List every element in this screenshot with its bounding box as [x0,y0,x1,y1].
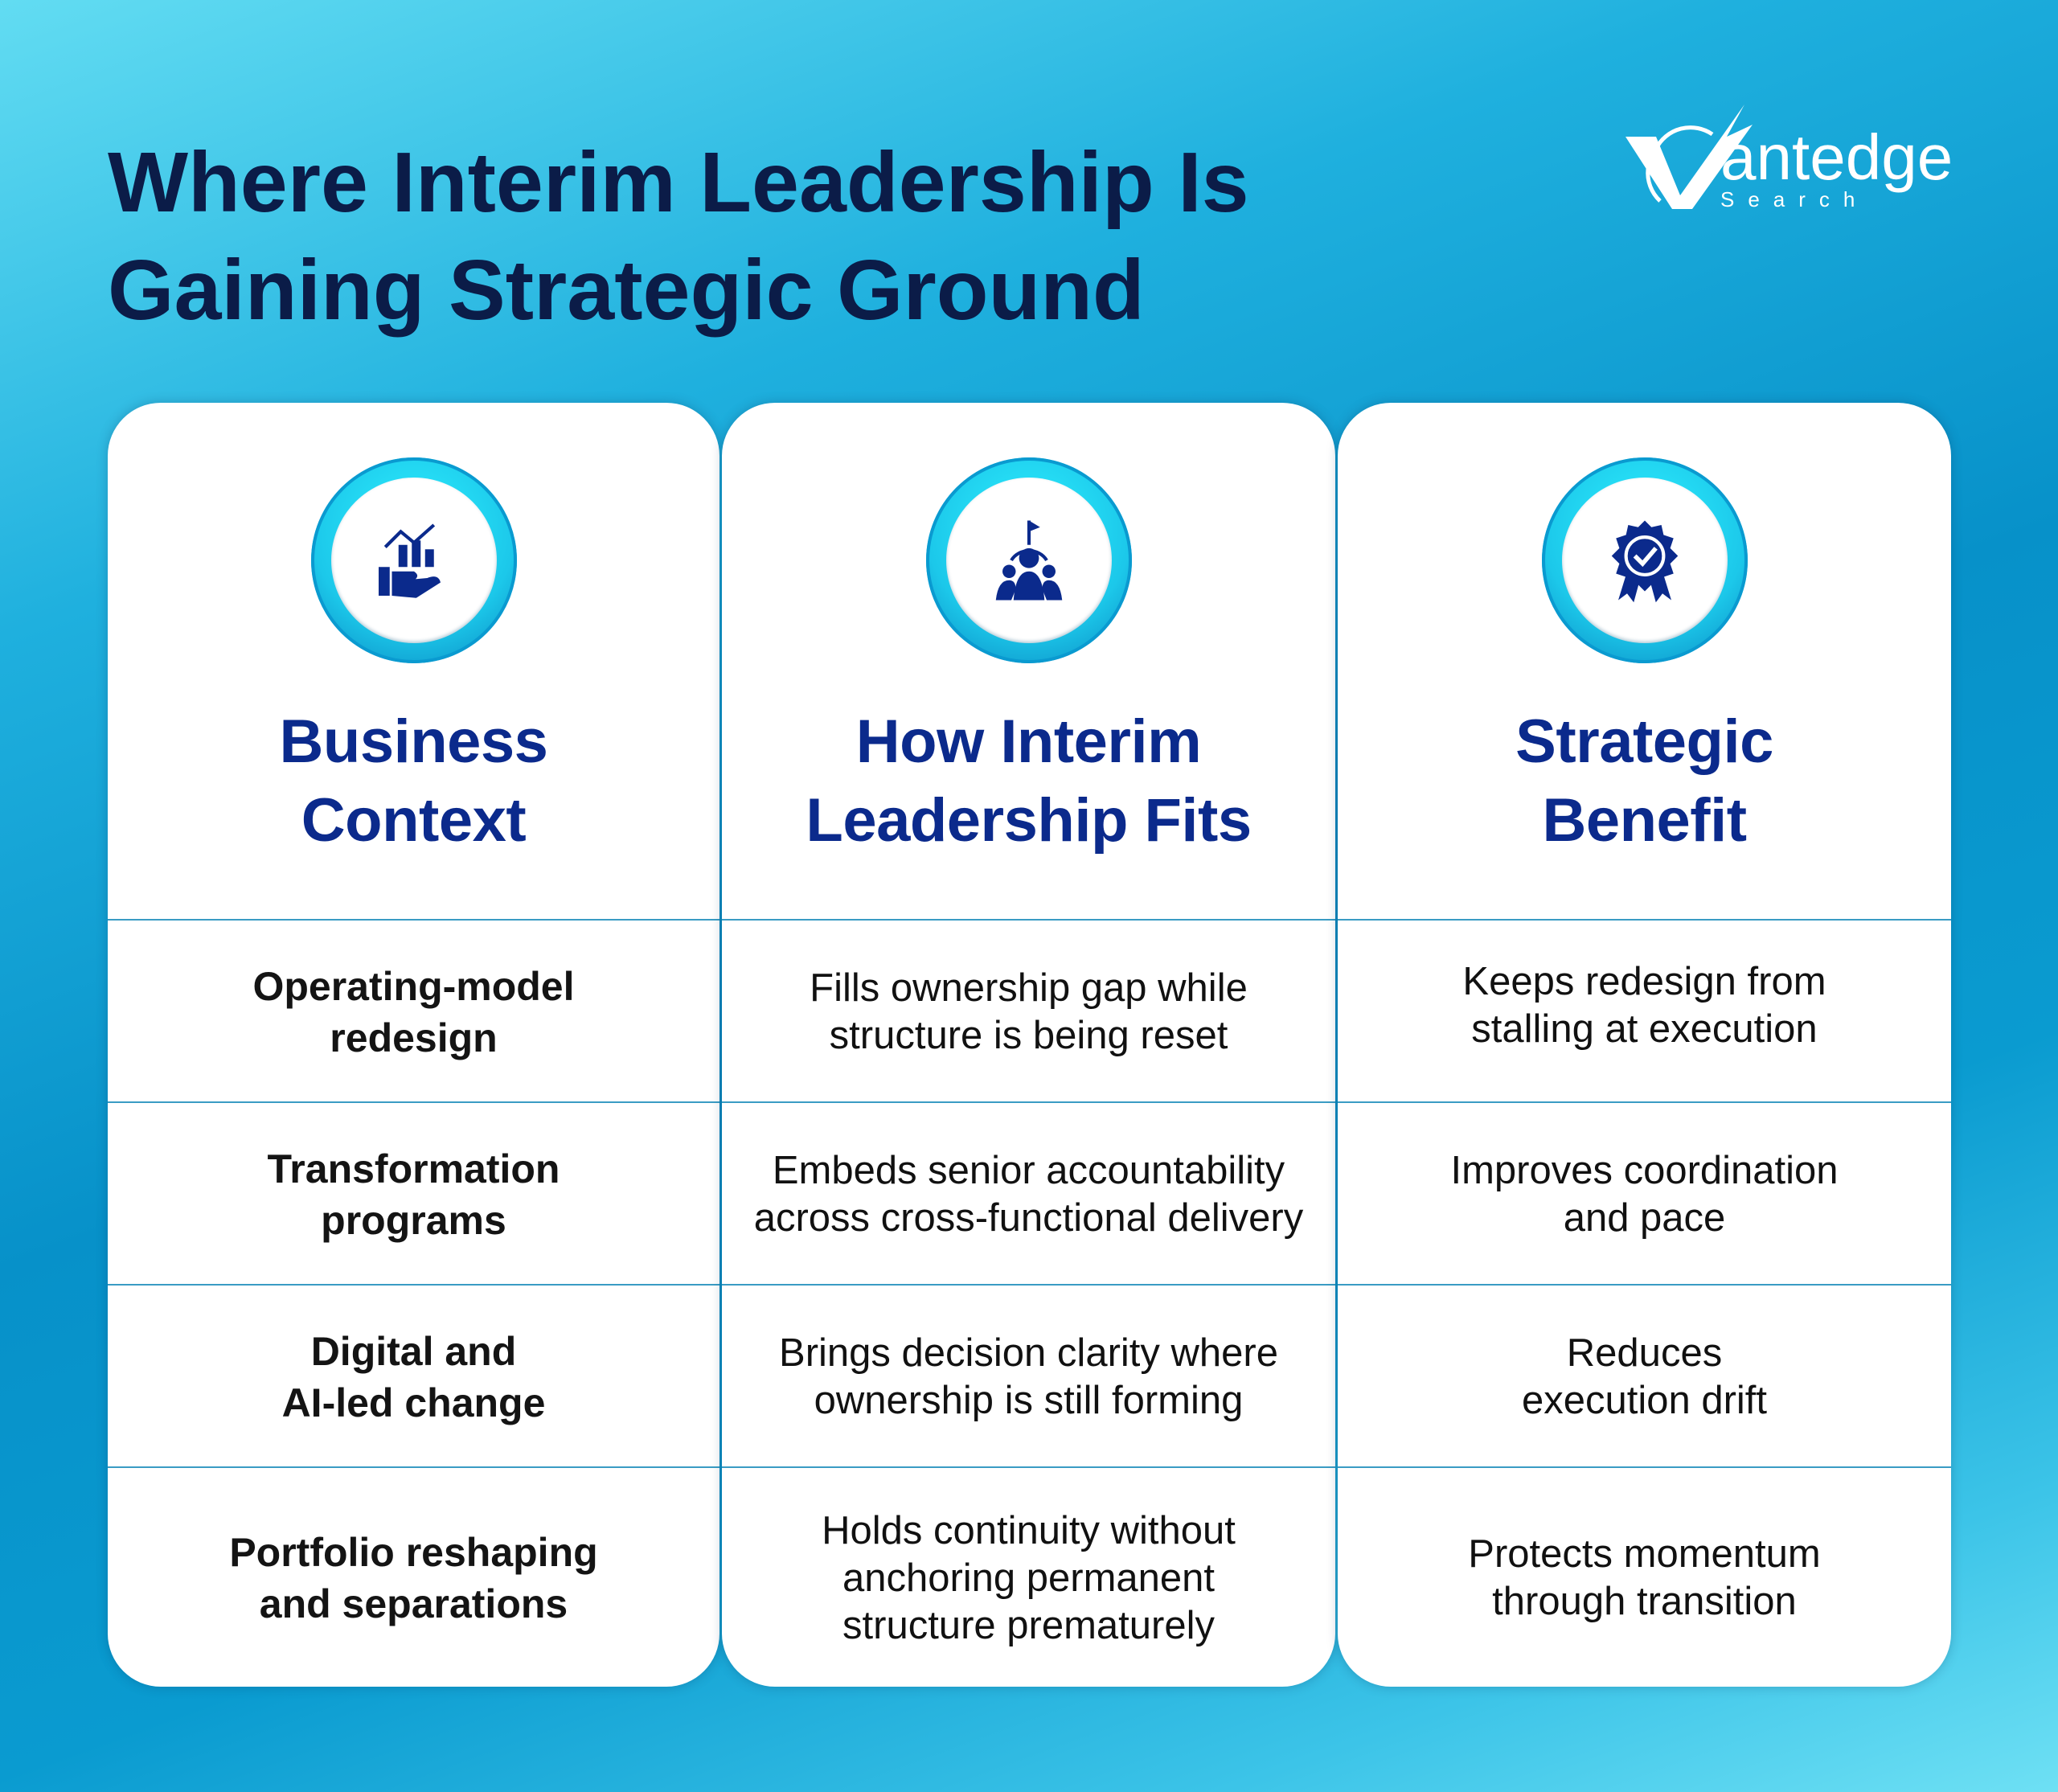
row 3: Digital and [311,1328,516,1373]
row 4: Holds continuity without [822,1508,1236,1552]
row 4 [108,1466,719,1688]
row 3 [108,1284,719,1468]
heading: Business [280,707,547,776]
row 1 [1338,919,1951,1101]
row 1: stalling at execution [1471,1007,1818,1050]
icon: hand with chart [310,457,516,663]
heading [1515,707,1773,855]
row 3 [1338,1284,1951,1468]
heading [806,707,1252,855]
row 1: Keeps redesign from [1462,960,1826,1003]
row 1 [108,919,719,1103]
panel: strategic benefit [1338,403,1951,1687]
row 4: Portfolio reshaping [229,1530,598,1575]
row 4: Protects momentum [1468,1532,1821,1576]
row 1 [722,919,1335,1103]
heading: Strategic [1515,707,1773,776]
row 1: redesign [330,1015,498,1060]
heading: Benefit [1542,786,1747,855]
row 3: Brings decision clarity where [779,1331,1278,1375]
panel: business context [108,403,719,1687]
row 2: and pace [1564,1196,1725,1240]
title [108,135,1249,338]
row 4 [1338,1466,1951,1688]
row 3 [722,1284,1335,1468]
row 3: AI-led change [282,1380,545,1425]
row 2: Embeds senior accountability [773,1148,1285,1191]
logo: Search [1720,187,1868,211]
row 1: Operating-model [252,963,575,1008]
icon: badge with check [1542,457,1748,663]
logo: antedge [1720,121,1953,193]
row 4: through transition [1492,1580,1797,1623]
row 2: across cross-functional delivery [754,1196,1303,1240]
row 2 [1338,1101,1951,1286]
row 3: Reduces [1567,1331,1722,1375]
row 2: Transformation [268,1146,560,1191]
row 3: ownership is still forming [814,1378,1243,1421]
heading: Context [301,786,526,855]
heading: How Interim [856,707,1201,776]
panel: how interim leadership fits [722,403,1335,1687]
row 2 [108,1101,719,1286]
row 1: Fills ownership gap while [810,966,1248,1010]
icon: team with flag [926,457,1132,663]
heading: Leadership Fits [806,786,1252,855]
row 2: Improves coordination [1450,1148,1839,1191]
row 3: execution drift [1522,1378,1767,1421]
row 4: anchoring permanent [842,1556,1215,1600]
row 4 [722,1466,1335,1688]
row 4: and separations [260,1581,568,1626]
row 4: structure prematurely [842,1603,1215,1646]
row 2 [722,1101,1335,1286]
title: Gaining Strategic Ground [108,243,1145,338]
logo [1625,105,1953,211]
heading [280,707,547,855]
row 1: structure is being reset [830,1013,1228,1056]
row 2: programs [321,1198,506,1243]
title: Where Interim Leadership Is [108,135,1249,230]
